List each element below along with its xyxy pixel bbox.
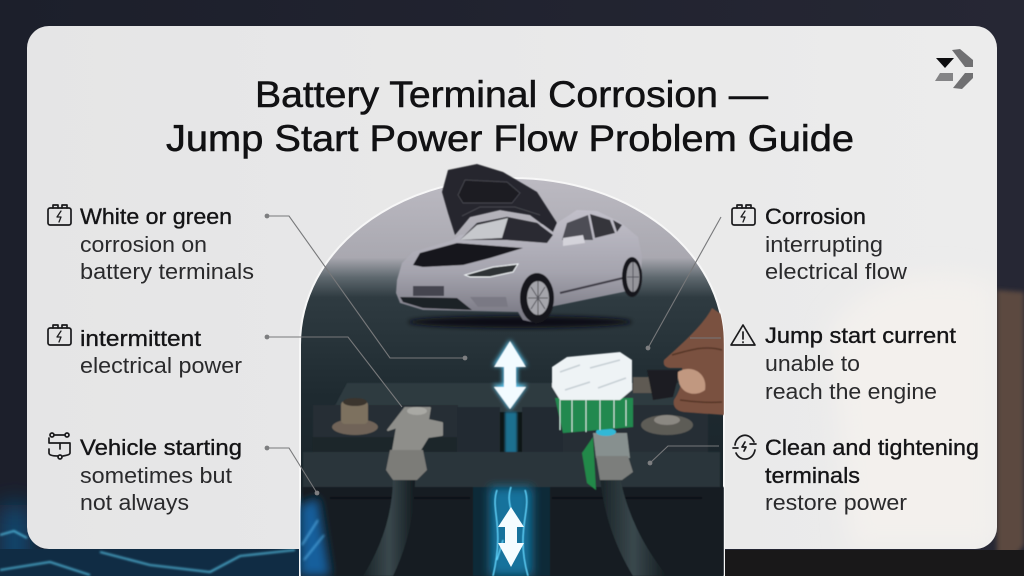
left item: white or green corrosion: corrosion on <box>80 232 207 257</box>
car body <box>396 210 642 323</box>
mirror <box>563 235 585 246</box>
central arch illustration <box>300 178 724 576</box>
left item: vehicle starting <box>49 433 242 515</box>
icon: refresh cycle <box>733 435 756 459</box>
right item: jump start current: reach the engine <box>765 379 937 404</box>
left item: white or green corrosion: battery terminals <box>80 259 254 284</box>
front bumper <box>400 297 472 310</box>
engine bay <box>413 243 523 267</box>
icon: battery bolt <box>48 205 71 225</box>
icon: battery bolt <box>732 205 755 225</box>
left item: intermittent power: electrical power <box>80 353 242 378</box>
blue glow at battery edge <box>300 498 330 576</box>
blue power channel <box>473 487 550 576</box>
left item: vehicle starting: Vehicle starting <box>80 435 242 460</box>
lower glowing arrow <box>498 507 524 567</box>
cleaning brush <box>552 352 680 433</box>
right item: jump start current <box>731 323 956 404</box>
leader lines <box>265 214 721 495</box>
battery <box>303 383 724 576</box>
icon: circuit <box>49 433 70 459</box>
icon: battery bolt <box>48 325 71 345</box>
headlight <box>465 264 518 277</box>
right item: clean and tighten: terminals <box>765 463 860 488</box>
title: Battery Terminal Corrosion — <box>255 74 768 115</box>
upper white power arrow <box>493 340 527 410</box>
right item: clean and tighten: restore power <box>765 490 907 515</box>
right item: jump start current: Jump start current <box>765 323 956 348</box>
logo mark <box>935 49 973 89</box>
icon: warning triangle <box>731 325 755 345</box>
title <box>166 74 854 159</box>
right item: corrosion interrupting flow <box>732 204 907 284</box>
right item: jump start current: unable to <box>765 351 860 376</box>
side windows <box>562 215 593 240</box>
right item: clean and tighten: Clean and tightening <box>765 435 979 460</box>
hood <box>442 164 557 235</box>
right item: clean and tighten <box>733 435 979 515</box>
wheels <box>520 273 554 323</box>
right item: corrosion interrupting flow: electrical flow <box>765 259 907 284</box>
right item: corrosion interrupting flow: Corrosion <box>765 204 866 229</box>
left item: intermittent power: intermittent <box>80 326 201 351</box>
left item: white or green corrosion <box>48 204 254 284</box>
left item: vehicle starting: not always <box>80 490 189 515</box>
title: Jump Start Power Flow Problem Guide <box>166 118 854 159</box>
car with open hood <box>396 164 642 328</box>
dark background with blurred hand and lightning <box>0 286 1024 576</box>
windshield <box>460 217 553 243</box>
right item: corrosion interrupting flow: interrupting <box>765 232 883 257</box>
right cable and clamp <box>582 428 667 576</box>
left item: vehicle starting: sometimes but <box>80 463 232 488</box>
battery post left <box>332 398 378 435</box>
battery post right <box>641 415 693 435</box>
hand <box>664 308 724 415</box>
left item: white or green corrosion: White or green <box>80 204 232 229</box>
left cable and clamp <box>363 407 442 576</box>
left item: intermittent power <box>48 325 242 378</box>
